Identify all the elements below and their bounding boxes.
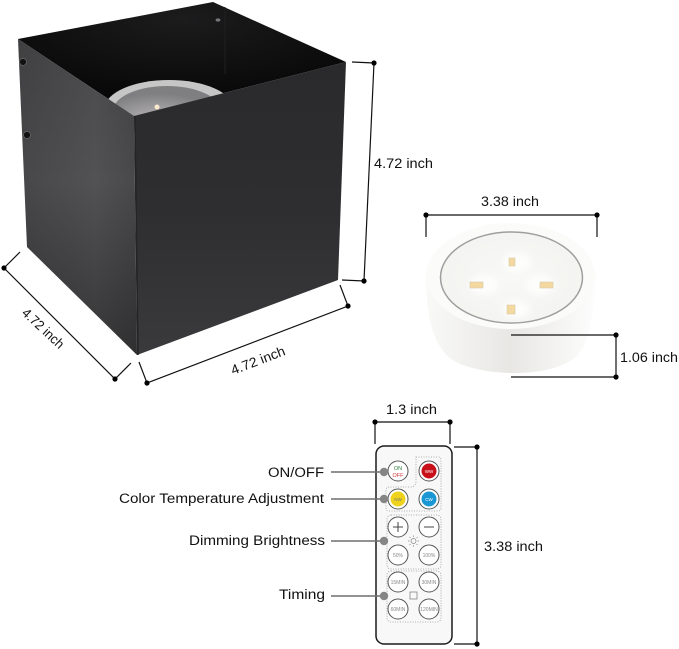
- dimension: cube side width: 4.72 inch: [19, 305, 67, 352]
- button: yellow NW: [388, 489, 408, 509]
- interior corner crease and rivet: [216, 7, 225, 74]
- front corner edge: [135, 116, 138, 355]
- callout: dimming: Dimming Brightness: [189, 533, 325, 548]
- button: 120MIN: 120MIN: [420, 607, 438, 613]
- dimension: puck height: [511, 332, 678, 380]
- cube interior: [18, 2, 346, 116]
- puck body: [426, 276, 595, 373]
- cube left face: [18, 39, 137, 355]
- button: 50%: [388, 545, 408, 565]
- callout: color temperature: Color Temperature Adjustment: [119, 491, 324, 506]
- dimension: cube front width: [139, 285, 351, 386]
- callout: timing: Timing: [279, 587, 325, 602]
- callout: on/off: [268, 465, 388, 480]
- button: plus: [388, 517, 408, 537]
- cube right face: [134, 62, 346, 355]
- dimension: remote height: [454, 444, 543, 647]
- button: 50%: 50%: [393, 553, 404, 559]
- button: 60MIN: 60MIN: [391, 607, 406, 613]
- button: on/off: ON: [394, 466, 402, 472]
- button: 100%: 100%: [423, 553, 436, 559]
- remote control: [376, 446, 452, 644]
- puck top: [426, 223, 595, 329]
- rivets: [20, 58, 30, 138]
- puck lens: [440, 232, 582, 323]
- LEDs: [470, 258, 553, 314]
- inner lamp puck: [105, 80, 233, 136]
- dimension: puck height: 1.06 inch: [620, 350, 678, 365]
- white puck light: [426, 223, 595, 373]
- button: blue CW: CW: [425, 497, 433, 502]
- dimension: cube front width: 4.72 inch: [229, 343, 287, 378]
- callout: dimming: [189, 533, 388, 548]
- button: 60MIN: [388, 599, 408, 619]
- LED glows: [470, 252, 554, 318]
- callout: color temperature: [119, 491, 388, 506]
- dimension: cube height: [342, 60, 433, 284]
- button: minus: [419, 517, 439, 537]
- button: 30MIN: 30MIN: [422, 580, 437, 586]
- button: 100%: [419, 545, 439, 565]
- dimension: cube side width: [1, 252, 131, 382]
- dimension: remote height: 3.38 inch: [484, 539, 543, 554]
- dimension: cube height: 4.72 inch: [374, 156, 433, 171]
- button: 120MIN: [419, 599, 439, 619]
- icon: brightness sun: [408, 536, 419, 546]
- button: yellow NW: NW: [394, 497, 402, 502]
- button: on/off: OFF: [392, 473, 404, 479]
- dimension: remote width: 1.3 inch: [386, 402, 437, 417]
- dotted button groups: [386, 457, 441, 511]
- callout: on/off: ON/OFF: [268, 465, 324, 480]
- dimension: puck diameter: [423, 194, 600, 237]
- button: blue CW: [419, 489, 439, 509]
- dimension: remote width: [372, 402, 453, 444]
- callout: timing: [279, 587, 388, 602]
- button: red WW: WW: [425, 469, 434, 474]
- button: on/off: [388, 461, 408, 481]
- button: 15MIN: 15MIN: [391, 580, 406, 586]
- button: 30MIN: [419, 572, 439, 592]
- remote body: [376, 446, 452, 644]
- black cube wall light: [18, 2, 346, 355]
- button: 15MIN: [388, 572, 408, 592]
- icon: timer: [410, 592, 417, 599]
- button: red WW: [419, 461, 439, 481]
- dimension: puck diameter: 3.38 inch: [481, 194, 539, 209]
